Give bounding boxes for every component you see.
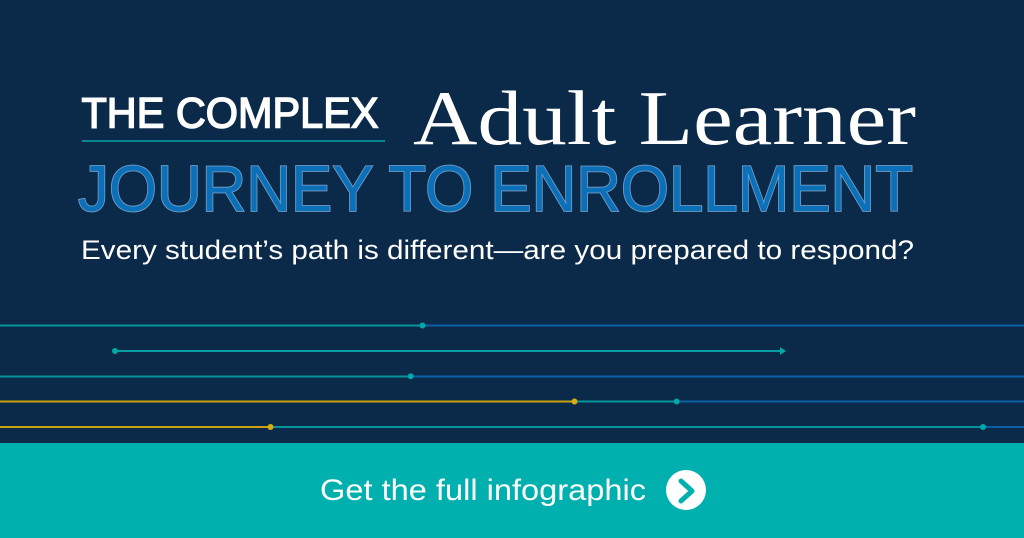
path line 3 [0,373,1024,379]
path line 4 [0,398,1024,404]
heading: journey to enrollment: JOURNEY TO ENROLLMENT [78,152,913,225]
heading: adult learner: Adult Learner [413,75,916,161]
path line 5 [0,424,1024,430]
path line 1 [0,322,1024,328]
call to action text: Get the full infographic [320,474,646,507]
heading: the complex: THE COMPLEX [82,90,378,138]
subtitle: Every student’s path is different—are you prepared to respond? [81,235,914,265]
path line 2 with arrow [112,347,786,355]
call to action band [0,443,1024,538]
heading underline [82,140,385,142]
icon: arrow button [666,470,706,510]
